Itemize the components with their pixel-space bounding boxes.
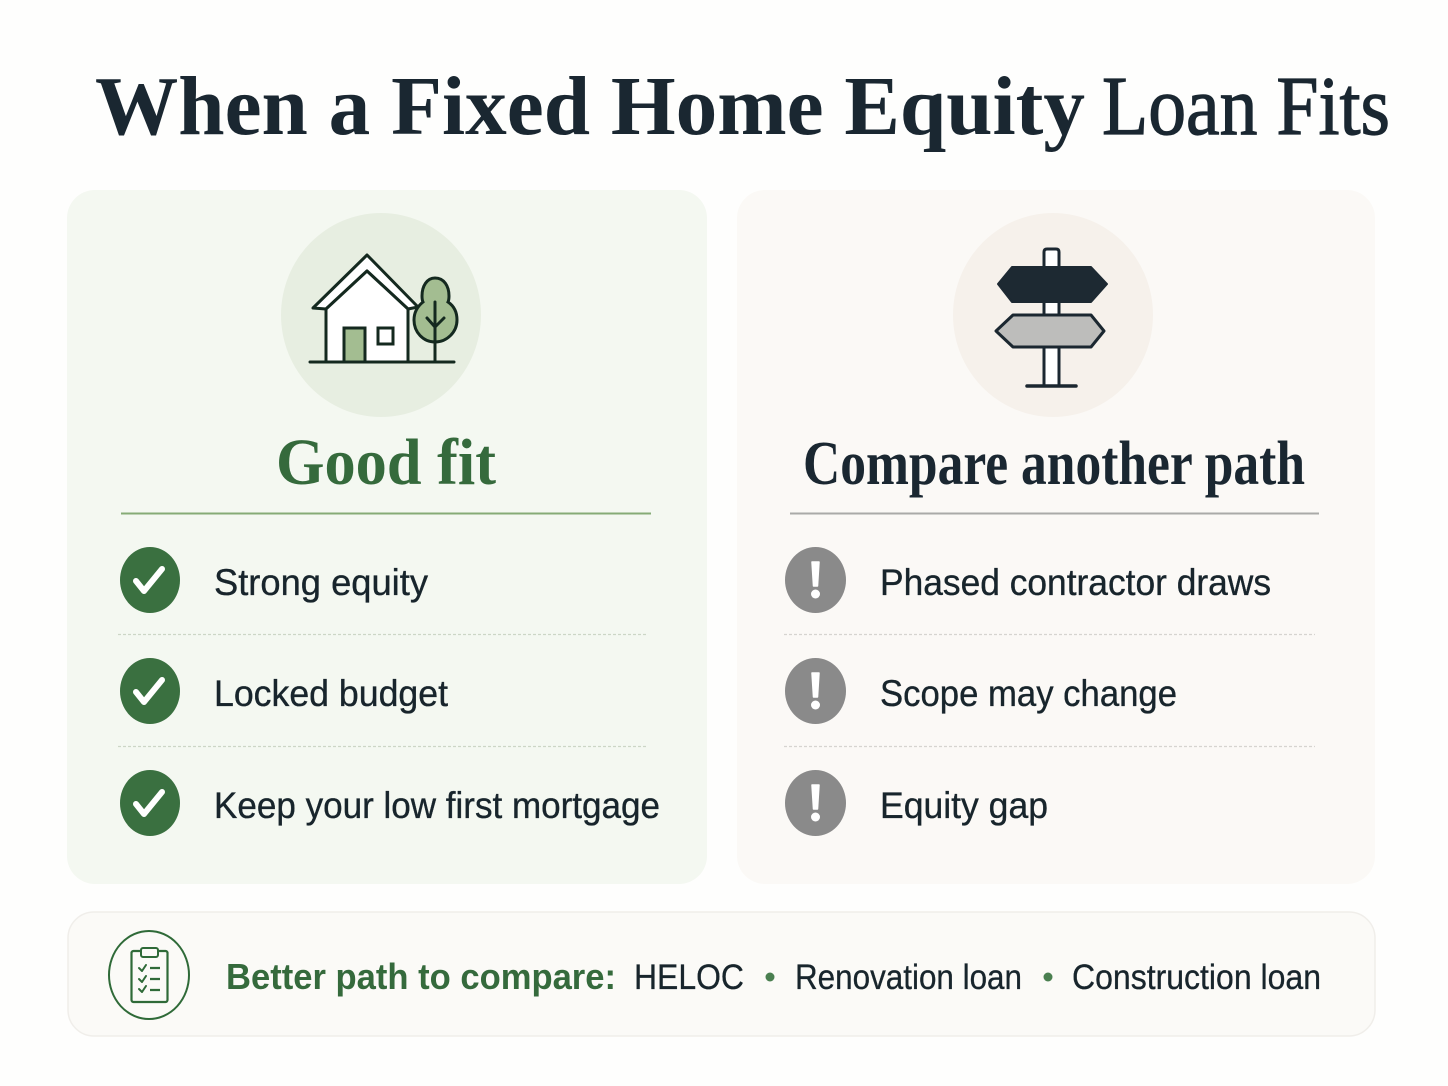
- item: locked budget: [120, 658, 449, 724]
- item: strong equity: [120, 547, 428, 613]
- heading: good fit: Good fit: [276, 426, 496, 499]
- panel: compare another path: [737, 190, 1375, 884]
- item: keep your low first mortgage: Keep your low first mortgage: [214, 785, 660, 826]
- option: construction loan: Construction loan: [1072, 958, 1321, 997]
- item: equity gap: [785, 770, 1048, 836]
- item: equity gap: Equity gap: [880, 785, 1048, 826]
- icon: clipboard checklist: [109, 931, 189, 1019]
- title: Loan Fits: [1102, 60, 1390, 153]
- panel: good fit: [67, 190, 707, 884]
- item: phased contractor draws: [785, 547, 1271, 613]
- icon: signpost: [953, 213, 1153, 417]
- item: locked budget: Locked budget: [214, 673, 449, 714]
- label: better path to compare: Better path to compare:: [226, 956, 616, 997]
- panel: better path to compare: [68, 912, 1375, 1036]
- item: scope may change: [785, 658, 1177, 724]
- item: scope may change: Scope may change: [880, 673, 1177, 714]
- option: HELOC: HELOC: [634, 958, 744, 997]
- item: keep your low first mortgage: [120, 770, 660, 836]
- item: phased contractor draws: Phased contractor draws: [880, 562, 1271, 603]
- heading: compare another path: Compare another path: [803, 430, 1305, 498]
- icon: house and tree: [281, 213, 481, 417]
- option: renovation loan: Renovation loan: [795, 958, 1022, 997]
- item: strong equity: Strong equity: [214, 562, 428, 603]
- title: When a Fixed Home Equity: [95, 60, 1085, 153]
